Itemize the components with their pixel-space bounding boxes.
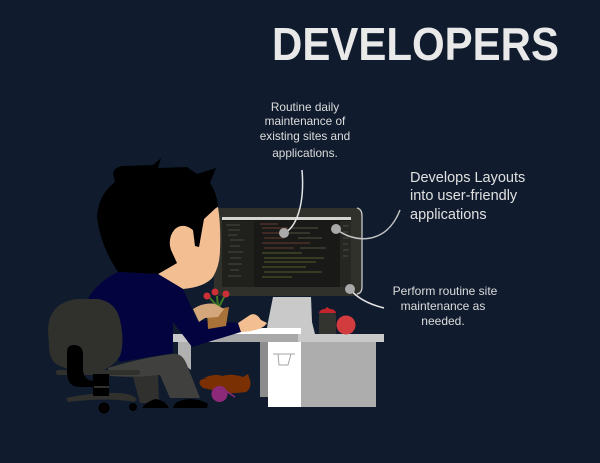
text: routine daily maintenance: Routine daily xyxy=(271,100,339,114)
callout line: maintenance xyxy=(345,284,384,308)
text: routine daily maintenance: applications. xyxy=(272,146,338,160)
text: develops layouts: Develops Layouts xyxy=(410,170,525,186)
text: develops layouts: into user-friendly xyxy=(410,188,518,204)
developer character xyxy=(88,158,267,408)
cat and yarn ball under desk xyxy=(199,374,250,402)
monitor stand xyxy=(266,297,315,334)
far hand xyxy=(238,314,267,332)
chair xyxy=(48,299,140,414)
callout: monitor outline xyxy=(357,208,362,294)
callout line: code area xyxy=(279,170,303,238)
jar and red ball xyxy=(319,307,356,334)
text: perform routine maintenance: maintenance as xyxy=(401,299,485,313)
potted plant xyxy=(204,288,230,329)
text: routine daily maintenance: maintenance of xyxy=(265,114,346,128)
desk drawer xyxy=(268,342,301,407)
desk xyxy=(171,328,384,407)
text: perform routine maintenance: Perform routine site xyxy=(393,284,498,298)
hair xyxy=(97,158,218,274)
legs xyxy=(132,373,159,403)
monitor xyxy=(214,208,362,296)
shoes xyxy=(142,399,169,408)
near hand xyxy=(193,304,224,322)
ear, face and neck xyxy=(158,207,220,289)
text: perform routine maintenance: needed. xyxy=(421,314,465,328)
torso and arm xyxy=(88,272,241,362)
text: develops layouts: applications xyxy=(410,207,487,223)
text: routine daily maintenance: existing sites and xyxy=(260,129,350,143)
callout line: layouts xyxy=(331,210,400,239)
title: DEVELOPERS xyxy=(272,18,559,70)
